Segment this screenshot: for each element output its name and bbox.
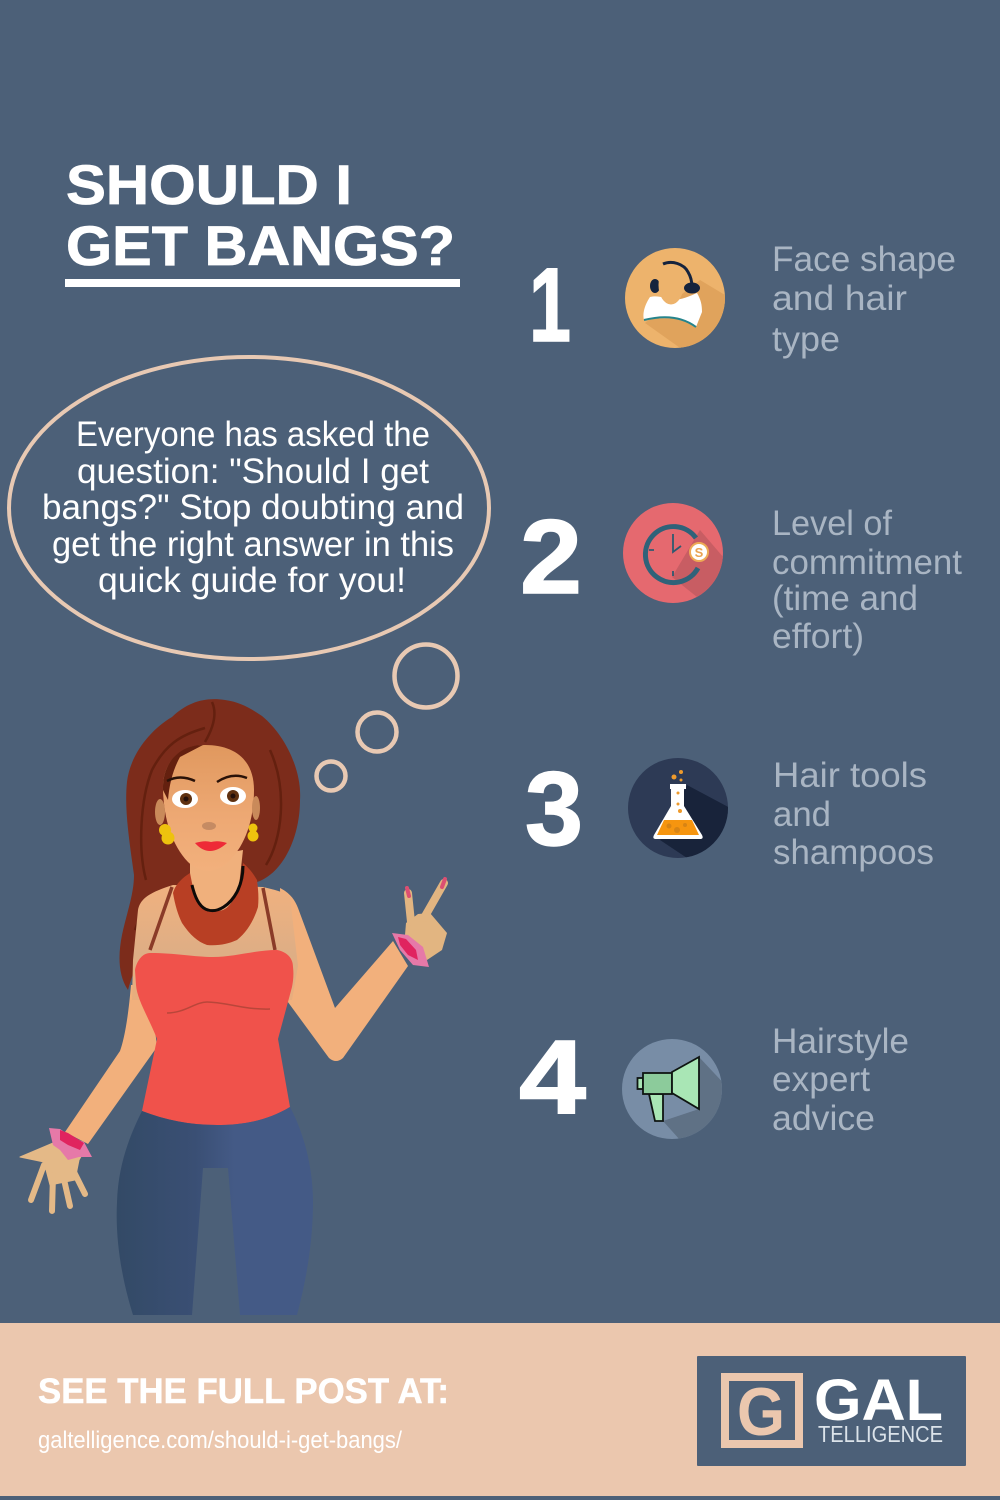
footer heading: SEE THE FULL POST AT: (38, 1372, 449, 1411)
necklace line (192, 866, 243, 911)
item 3: 3 (525, 751, 583, 868)
item 4: 4 (519, 1019, 586, 1136)
left hand (20, 1143, 86, 1211)
right hand (405, 879, 447, 960)
red top (135, 950, 293, 1125)
item 4 label: expert (772, 1060, 870, 1099)
item 2: 2 (520, 499, 582, 616)
icon: flask (628, 758, 730, 860)
footer url: galtelligence.com/should-i-get-bangs/ (38, 1427, 402, 1454)
speech bubble: Everyone has asked the (76, 415, 430, 454)
item 3 label: Hair tools (773, 756, 927, 795)
left ear (155, 799, 165, 825)
item 3 label: and (773, 795, 831, 834)
item 2 label: effort) (772, 617, 864, 656)
item 1 label (772, 240, 956, 359)
footer band (0, 1323, 1000, 1496)
item 4 label: Hairstyle (772, 1022, 909, 1061)
item 2 label: Level of (772, 504, 892, 543)
item 2 label: (time and (772, 579, 918, 618)
thought bubbles (316, 644, 458, 790)
chest and shoulders (132, 885, 298, 1000)
title: GET BANGS? (66, 214, 455, 277)
item 4 label: advice (772, 1099, 875, 1138)
top seam (167, 1002, 270, 1013)
title (65, 153, 460, 287)
logo: TELLIGENCE (818, 1421, 943, 1447)
item 2 (523, 503, 723, 603)
left scrunchie (49, 1128, 92, 1160)
eyebrows (167, 776, 247, 782)
item 3 label (773, 756, 934, 872)
fringe shadow (163, 745, 203, 800)
speech bubble: bangs?" Stop doubting and (42, 488, 464, 527)
icon: face and hair (625, 248, 730, 350)
jeans (117, 1107, 313, 1315)
item 3 (526, 758, 728, 858)
logo: GAL (814, 1368, 943, 1433)
item 3 label: shampoos (773, 833, 934, 872)
logo (697, 1356, 966, 1466)
speech bubble: get the right answer in this (52, 525, 454, 564)
speech bubble: question: "Should I get (77, 452, 429, 491)
item 4 label (772, 1022, 909, 1138)
item 2 label (772, 504, 962, 656)
icon: clock and coin (623, 503, 730, 603)
right arm (280, 888, 408, 1061)
item 1 label: Face shape (772, 240, 956, 279)
straps (150, 887, 275, 950)
scarf (173, 863, 258, 945)
woman illustration (20, 699, 447, 1315)
speech bubble: quick guide for you! (98, 561, 406, 600)
item 1 (533, 248, 725, 348)
right scrunchie (392, 933, 429, 967)
speech bubble (9, 357, 489, 659)
earrings (159, 824, 258, 844)
title: SHOULD I (66, 153, 352, 216)
item 1 label: type (772, 320, 840, 359)
neck (190, 850, 243, 912)
eyes (172, 787, 246, 808)
left arm (65, 985, 157, 1144)
right ear (252, 796, 260, 820)
item 1: 1 (529, 247, 571, 364)
icon: megaphone (622, 1039, 730, 1140)
item 2 label: commitment (772, 543, 962, 582)
nose (202, 822, 216, 830)
lips (195, 841, 227, 851)
icon: clock and coin: S (695, 545, 704, 560)
face (163, 745, 254, 871)
hair back (120, 699, 300, 990)
item 4 (520, 1039, 722, 1139)
item 1 label: and hair (772, 279, 907, 318)
hair shading (135, 702, 281, 930)
logo: G (737, 1374, 785, 1450)
